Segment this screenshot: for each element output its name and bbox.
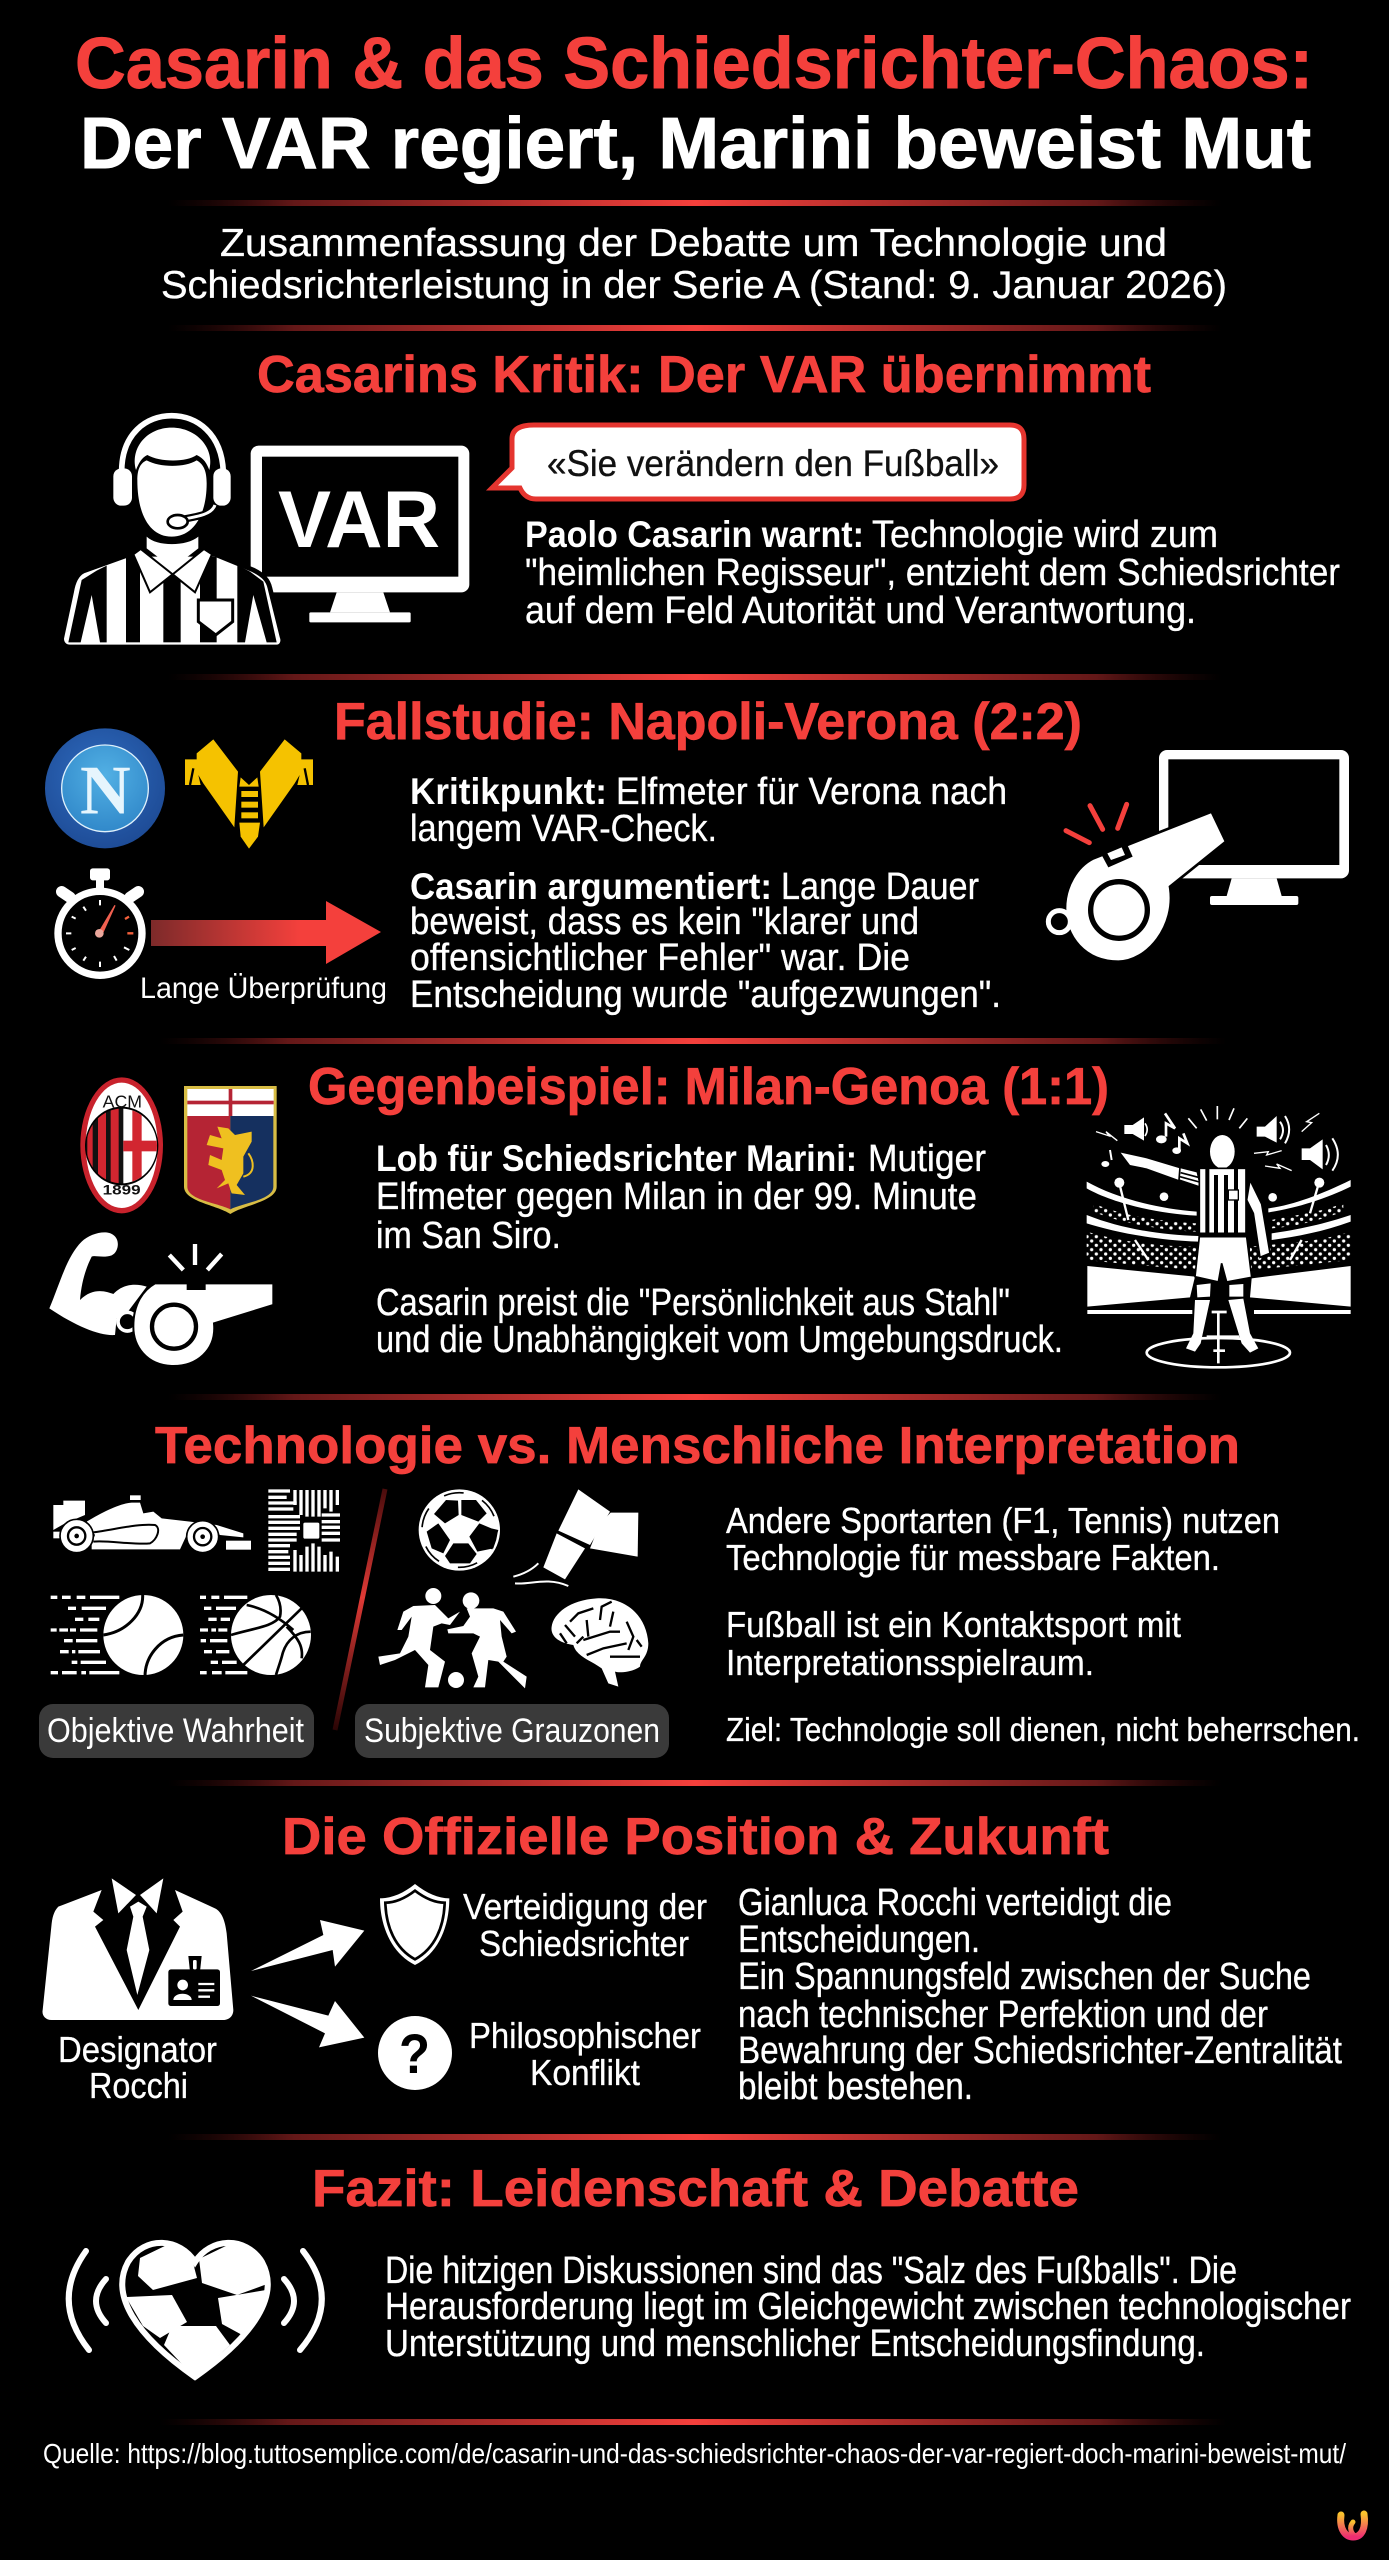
icon: Genoa crest [184,1086,277,1214]
icon: two players [378,1588,527,1688]
heading: Die Offizielle Position: Die Offizielle Position & Zukunft [282,1808,1109,1866]
icon: F1 car [53,1495,251,1553]
panel: Gegenbeispiel Milan-Genoa [49,1058,1351,1367]
subtitle: Zusammenfassung der Debatte um Technologie und [220,222,1167,265]
text block: conclusion: Die hitzigen Diskussionen sind das "Salz des Fußballs". Die [385,2250,1237,2292]
icon: Verona crest [185,739,313,849]
icon: Napoli crest: N [80,752,131,829]
text block: Kritikpunkt: Kritikpunkt: [410,771,607,812]
text block: other sports: Andere Sportarten (F1, Tennis) nutzen [726,1500,1280,1541]
text block: football contact sport: Interpretationsspielraum. [726,1642,1094,1683]
panel: Casarins Kritik [62,346,1340,647]
label: Designator Rocchi: Rocchi [89,2065,188,2106]
panel: Fallstudie Napoli-Verona [45,693,1349,1016]
label pill: Objektive Wahrheit [39,1704,314,1758]
text block: Casarin argumentiert: Entscheidung wurde "aufgezwungen". [410,974,1001,1016]
icon: suit with ID badge [42,1878,233,2020]
icon: brain [551,1598,648,1687]
panel: Fazit [69,2160,1351,2378]
label pill: Objektive Wahrheit: Objektive Wahrheit [47,1712,304,1750]
heading: Technologie vs. Menschliche Interpretation: Technologie vs. Menschliche Interpretation [155,1417,1240,1475]
text block: Casarin argumentiert: Lange Dauer [781,866,979,908]
icon: AC Milan crest [80,1077,163,1213]
icon: AC Milan crest: ACM [103,1091,142,1111]
label pill: Subjektive Grauzonen [355,1704,669,1758]
text block: Rocchi: Gianluca Rocchi verteidigt die [738,1882,1172,1924]
label: Philosophischer Konflikt: Konflikt [530,2052,640,2093]
text block: Persönlichkeit aus Stahl: Casarin preist die "Persönlichkeit aus Stahl" [376,1282,1010,1324]
text block: Casarin argumentiert: offensichtlicher Fehler" war. Die [410,937,910,979]
heading: Fazit: Fazit: Leidenschaft & Debatte [312,2160,1079,2218]
text block: conclusion: Unterstützung und menschlicher Entscheidungsfindung. [385,2323,1205,2365]
text block: Rocchi: bleibt bestehen. [738,2066,973,2108]
icon: circuit chip [268,1490,340,1572]
label: Designator Rocchi: Designator [58,2029,217,2070]
text block: Casarin argumentiert: beweist, dass es kein "klarer und [410,901,919,943]
label: Verteidigung der Schiedsrichter: Schiedsrichter [479,1923,689,1964]
label: Philosophischer Konflikt [469,2015,701,2093]
icon: stopwatch [58,868,142,975]
arrow: to conflict [251,1996,364,2047]
arrow: long review [151,901,381,964]
subtitle [161,222,1227,307]
callout: quote bubble [492,425,1024,499]
text block: football contact sport [726,1604,1181,1683]
arrow: to defence [251,1920,364,1971]
text block: Paolo Casarin warnt [525,514,1340,632]
icon: football heart with sound waves [69,2242,322,2378]
icon: AC Milan crest: 1899 [103,1182,141,1198]
subtitle: Schiedsrichterleistung in der Serie A (Stand: 9. Januar 2026) [161,264,1227,307]
text block: Paolo Casarin warnt: "heimlichen Regisseur", entzieht dem Schiedsrichter [525,552,1340,594]
text block: Casarin argumentiert: Casarin argumentiert: [410,866,772,907]
heading: Casarins Kritik: Casarins Kritik: Der VAR übernimmt [257,346,1151,404]
icon: foot contact [513,1489,638,1586]
text block: football contact sport: Fußball ist ein Kontaktsport mit [726,1604,1181,1645]
text block: Persönlichkeit aus Stahl [376,1282,1063,1361]
icon: question mark [378,2016,452,2090]
text block: Kritikpunkt: langem VAR-Check. [410,808,717,850]
text block: Kritikpunkt: Elfmeter für Verona nach [616,771,1007,813]
callout: quote bubble: «Sie verändern den Fußball» [547,443,999,484]
divider slash [335,1489,385,1730]
text block: Paolo Casarin warnt: Paolo Casarin warnt: [525,514,864,555]
icon: question mark: ? [399,2022,430,2085]
icon: VAR monitor [251,446,469,622]
heading: Gegenbeispiel: Gegenbeispiel: Milan-Genoa (1:1) [308,1058,1109,1116]
icon: VAR monitor: VAR [278,475,440,565]
text block: Casarin argumentiert [410,866,1001,1016]
text block: Kritikpunkt [410,771,1007,850]
label: Verteidigung der Schiedsrichter [463,1886,707,1964]
icon: football [419,1489,500,1571]
title: Der VAR regiert, Marini beweist Mut [80,104,1311,184]
panel: Offizielle Position [42,1808,1342,2108]
text block: other sports: Technologie für messbare Fakten. [726,1537,1220,1578]
icon: strong arm and whistle [49,1232,273,1366]
text block: Paolo Casarin warnt: auf dem Feld Autorität und Verantwortung. [525,590,1196,632]
text block: Paolo Casarin warnt: Technologie wird zum [872,514,1218,556]
title: Casarin & das Schiedsrichter-Chaos: [75,24,1313,104]
label pill: Subjektive Grauzonen: Subjektive Grauzonen [364,1712,660,1750]
text block: conclusion [385,2250,1351,2365]
text block: Rocchi: Ein Spannungsfeld zwischen der Suche [738,1956,1311,1998]
label: Verteidigung der Schiedsrichter: Verteidigung der [463,1886,707,1927]
text block: Rocchi [738,1882,1342,2108]
text block: Lob für Marini: Mutiger [868,1138,986,1180]
icon: whistle and monitor [1048,750,1349,962]
text block: Rocchi: nach technischer Perfektion und der [738,1994,1268,2036]
text block: Lob für Marini [376,1138,986,1257]
text block: Lob für Marini: Lob für Schiedsrichter Marini: [376,1138,857,1179]
panel: Technologie vs. Interpretation [39,1417,1360,1758]
icon: corner logo [1341,2514,1365,2537]
icon: referee in stadium [1087,1106,1351,1367]
text block: Lob für Marini: Elfmeter gegen Milan in der 99. Minute [376,1176,977,1218]
icon: tennis ball [51,1595,183,1677]
label: Lange Überprüfung: Lange Überprüfung [140,972,387,1005]
icon: shield [380,1884,449,1965]
text block: Rocchi: Entscheidungen. [738,1919,980,1961]
text block: Lob für Marini: im San Siro. [376,1215,561,1257]
text block: other sports [726,1500,1280,1578]
heading: Fallstudie: Fallstudie: Napoli-Verona (2:2) [334,693,1082,751]
icon: basketball [200,1595,311,1675]
label: Designator Rocchi [58,2029,217,2106]
icon: referee with headset [62,416,283,647]
text block: Persönlichkeit aus Stahl: und die Unabhängigkeit vom Umgebungsdruck. [376,1319,1063,1361]
label: Philosophischer Konflikt: Philosophischer [469,2015,701,2056]
icon: Napoli crest [45,728,165,848]
title [75,24,1313,184]
